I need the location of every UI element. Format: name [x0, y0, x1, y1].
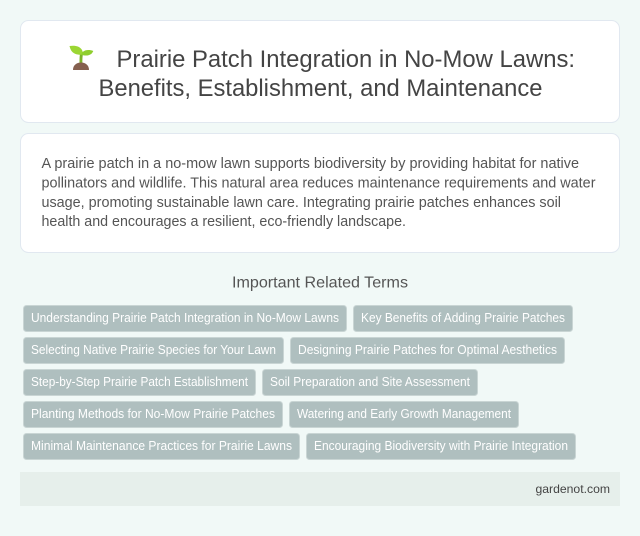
tag 10: Encouraging Biodiversity with Prairie Integration [314, 439, 568, 453]
title: Benefits, Establishment, and Maintenance [98, 75, 542, 102]
tag 7 [24, 402, 282, 428]
footer [20, 472, 620, 506]
description text: health and encourages a resilient, eco-friendly landscape. [42, 214, 406, 230]
tag list [24, 306, 576, 460]
tag 2 [354, 306, 572, 332]
tag 8 [290, 402, 518, 428]
description text: usage, promoting sustainable lawn care. Integrating prairie patches enhances soil [42, 195, 561, 211]
tag 1: Understanding Prairie Patch Integration in No-Mow Lawns [31, 311, 339, 325]
footer: gardenot.com [536, 482, 610, 496]
tag 6 [262, 370, 478, 396]
tag 6: Soil Preparation and Site Assessment [270, 375, 470, 389]
title: Prairie Patch Integration in No-Mow Lawns: [116, 46, 575, 73]
tag 9 [24, 434, 300, 460]
tag 9: Minimal Maintenance Practices for Prairie Lawns [31, 439, 292, 453]
tag 8: Watering and Early Growth Management [297, 407, 511, 421]
title [98, 46, 575, 102]
tag 3 [24, 338, 284, 364]
panel: description card [20, 134, 620, 252]
icon: seedling [70, 46, 93, 70]
description text: A prairie patch in a no-mow lawn supports biodiversity by providing habitat for native [42, 156, 579, 172]
tag 4 [290, 338, 564, 364]
tag 7: Planting Methods for No-Mow Prairie Patches [31, 407, 275, 421]
description text: pollinators and wildlife. This natural area reduces maintenance requirements and water [42, 176, 596, 192]
panel: title card [20, 20, 620, 122]
tag 10 [306, 434, 576, 460]
tag 2: Key Benefits of Adding Prairie Patches [361, 311, 565, 325]
heading: important related terms: Important Related Terms [232, 274, 408, 292]
tag 3: Selecting Native Prairie Species for Your Lawn [31, 343, 276, 357]
tag 4: Designing Prairie Patches for Optimal Aesthetics [298, 343, 557, 357]
tag 5: Step-by-Step Prairie Patch Establishment [31, 375, 248, 389]
description text [42, 156, 596, 230]
tag 1 [24, 306, 346, 332]
tag 5 [24, 370, 256, 396]
